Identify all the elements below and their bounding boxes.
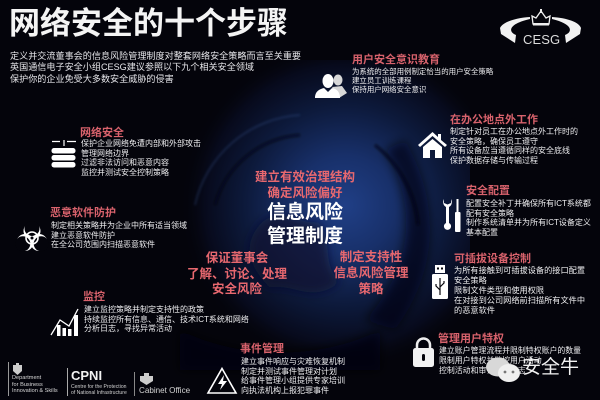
body: incident management [241,357,345,394]
heading: monitoring: 监控 [83,291,105,303]
body: monitoring [84,305,249,333]
central heading: information risk management regime: 管理制度 [267,226,343,246]
panel: monitoring [50,290,249,336]
body: secure configuration: 制作系统清单并为所有ICT设备定义 [466,218,591,227]
central block: policy: 信息风险管理 [333,266,408,280]
panel: malware protection [17,206,187,251]
body: user awareness [352,67,494,94]
body: secure configuration: 配有安全策略 [466,209,514,218]
central block: policy: 策略 [358,282,384,296]
heading: managing user privileges: 管理用户特权 [438,333,504,345]
heading: secure configuration: 安全配置 [466,185,510,197]
central block: board: 保证董事会 [206,251,268,265]
heading: incident management: 事件管理 [240,343,284,355]
body: removable media [454,266,585,315]
body: network security: 过滤非法访问和恶意内容 [81,158,169,167]
body: managing user privileges: 建立账户管理流程并限制特权账户的数量 [439,346,581,355]
central heading: information risk management regime: 信息风险 [267,202,343,223]
body: secure configuration: 配置安全补丁并确保所有ICT系统都 [466,199,591,208]
logo: Cabinet Office [134,372,195,396]
icon: warning triangle [206,367,238,394]
logo: CESG [500,9,581,47]
central heading: information risk management regime [267,202,343,246]
intro text: 保护你的企业免受大多数安全威胁的侵害 [10,74,174,84]
body: home working: 制定针对员工在办公地点外工作时的 [450,127,578,136]
central block: board [187,251,287,296]
icon: padlock [413,337,434,367]
body: incident management: 向执法机构上报犯罪事件 [241,386,329,394]
watermark: WeChat icon and name: 安全牛 [522,357,579,378]
body: removable media: 的恶意软件 [454,306,495,315]
icon: royal crest [140,373,153,385]
body: network security [81,139,201,176]
intro text: 英国通信电子安全小组CESG建议参照以下九个相关安全领域 [10,62,254,72]
central block: governance: 建立有效治理结构 [255,170,355,184]
body: secure configuration [466,199,591,237]
body: managing user privileges: 限制用户特权并监控用户活动 [439,356,542,365]
icon: biohazard [17,226,47,251]
intro text: 定义并交流董事会的信息风险管理制度对整套网络安全策略而言至关重要 [10,51,301,61]
body: network security: 管理网络边界 [81,148,129,158]
icon: server [52,140,76,168]
body: removable media: 安全策略 [454,276,487,285]
central block: policy: 制定支持性 [340,250,402,264]
body: home working: 保护数据存储与传输过程 [450,156,538,165]
panel: secure configuration [443,184,591,237]
body: home working: 所有设备应当遵循同样的安全底线 [450,146,570,155]
central block: governance [255,170,355,200]
body: monitoring: 分析日志，寻找异常活动 [84,324,172,333]
body: malware protection [51,221,187,249]
heading: removable media: 可插拔设备控制 [454,253,531,265]
body: home working [450,127,578,165]
icon: house [418,132,447,158]
body: malware protection: 在全公司范围内扫描恶意软件 [51,240,155,249]
body: incident management: 制定并测试事件管理对计划 [241,366,337,376]
central block: board: 安全风险 [212,282,262,296]
title: 网络安全的十个步骤 [9,6,288,41]
icon: USB drive [432,265,448,299]
logo: Department for Business: Innovation & Skills [12,388,58,394]
body: user awareness: 建立员工训练课程 [352,76,412,85]
body: home working: 安全策略，确保员工遵守 [450,137,538,146]
body: managing user privileges [439,346,581,375]
central block: governance: 确定风险偏好 [267,186,342,200]
central block: board: 了解、讨论、处理 [187,267,287,281]
heading: user awareness: 用户安全意识教育 [352,54,440,66]
body: removable media: 限制文件类型和使用权限 [454,286,544,295]
intro text [10,51,301,84]
central block: policy [333,250,408,296]
logo: CPNI: CPNI [71,368,102,383]
body: user awareness: 保持用户网络安全意识 [352,85,426,94]
logo: CESG: CESG [523,32,560,47]
logo: Cabinet Office: Cabinet Office [139,386,190,395]
body: malware protection: 制定相关策略并为企业中所有适当领域 [51,221,187,230]
watermark: WeChat icon and name [486,356,579,382]
icon: users [315,74,347,98]
panel: incident management [206,342,345,394]
panel: user awareness [315,54,494,98]
body: monitoring: 建立监控策略并制定支持性的政策 [84,305,204,314]
body: secure configuration: 基本配置 [466,228,498,237]
body: removable media: 为所有接触到可插拔设备的接口配置 [454,266,585,275]
heading: home working: 在办公地点外工作 [450,114,538,126]
heading: network security: 网络安全 [80,127,124,139]
body: removable media: 在对接到公司网络前扫描所有文件中 [454,296,585,305]
body: incident management: 建立事件响应与灾难恢复机制 [241,357,345,366]
logo: Department for Business [8,362,65,396]
panel: home working [418,114,578,165]
icon: tools [443,199,460,232]
panel: network security [52,126,201,176]
logo: CPNI: Centre for the Protection [71,384,126,390]
panel: managing user privileges [413,332,581,375]
logo: CPNI [67,368,130,396]
body: monitoring: 持续监控所有信息、通信、技术ICT系统和网络 [84,314,249,324]
logo: CPNI: of National Infrastructure [71,390,127,396]
body: network security: 保护企业网络免遭内部和外部攻击 [81,139,201,148]
body: network security: 监控并测试安全控制策略 [81,168,169,176]
body: managing user privileges: 控制活动和审计访问日志 [439,366,526,375]
body: user awareness: 为系统的全部用例制定恰当的用户安全策略 [352,67,493,76]
logo: Department for Business: for Business [12,382,43,388]
heading: malware protection: 恶意软件防护 [50,207,116,219]
logo: Department for Business: Department [12,375,41,381]
panel: removable media [432,252,585,315]
body: incident management: 给事件管理小组提供专家培训 [241,376,345,385]
icon: crest [13,363,22,375]
body: malware protection: 建立恶意软件防护 [51,231,115,240]
icon: rising chart [50,308,78,336]
